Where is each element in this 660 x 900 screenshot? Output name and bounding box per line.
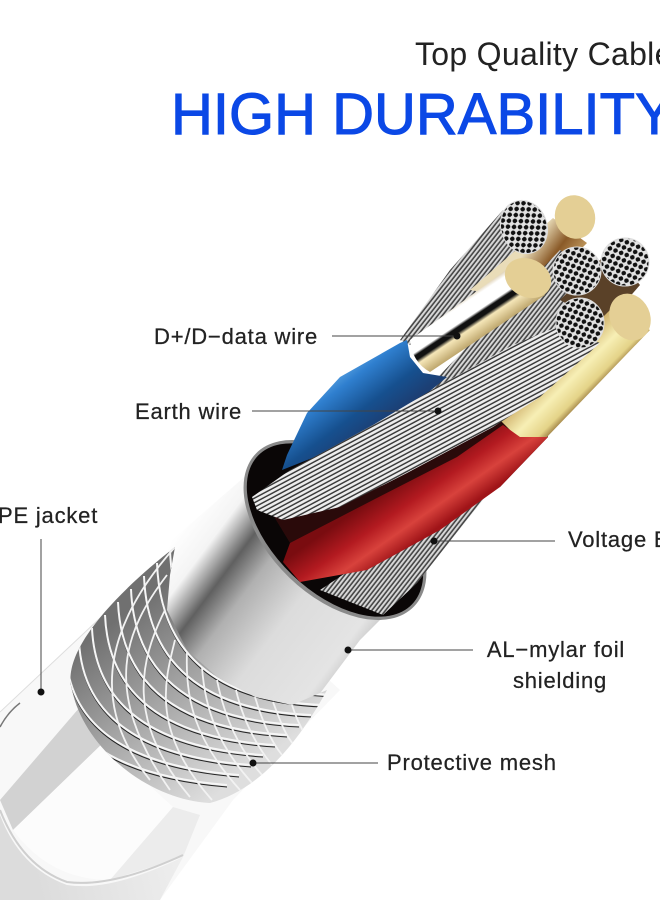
foil opening with wires inside <box>210 189 658 654</box>
dark strands between earth and red wires <box>270 395 548 543</box>
blue data wire <box>282 340 447 470</box>
foil tube <box>150 465 420 720</box>
PE jacket body <box>0 543 340 900</box>
lower gold conductor <box>500 287 658 440</box>
callout: earth wire: Earth wire <box>135 399 242 424</box>
callout: PE jacket <box>0 503 98 696</box>
lower silver strand <box>320 487 493 615</box>
callout: foil shielding <box>344 637 625 693</box>
callout: data wire: D+/D−data wire <box>154 324 318 349</box>
callout: voltage <box>430 527 660 552</box>
callout: foil shielding: shielding <box>513 668 607 693</box>
back silver and gold strands <box>400 189 640 430</box>
protective mesh <box>53 547 335 803</box>
callout: foil shielding: AL−mylar foil <box>487 637 625 662</box>
callout: protective mesh <box>250 750 557 775</box>
red voltage wire <box>283 425 548 582</box>
title <box>171 36 660 147</box>
main heading: HIGH DURABILITY <box>171 82 660 147</box>
earth wire silver strand <box>252 327 600 520</box>
callout: protective mesh: Protective mesh <box>387 750 557 775</box>
callout: data wire <box>154 324 460 349</box>
callout: earth wire <box>135 399 442 424</box>
inner sleeve band <box>0 707 200 900</box>
strand end faces <box>493 194 649 348</box>
callout: PE jacket: PE jacket <box>0 503 98 528</box>
gold conductor <box>410 251 558 372</box>
